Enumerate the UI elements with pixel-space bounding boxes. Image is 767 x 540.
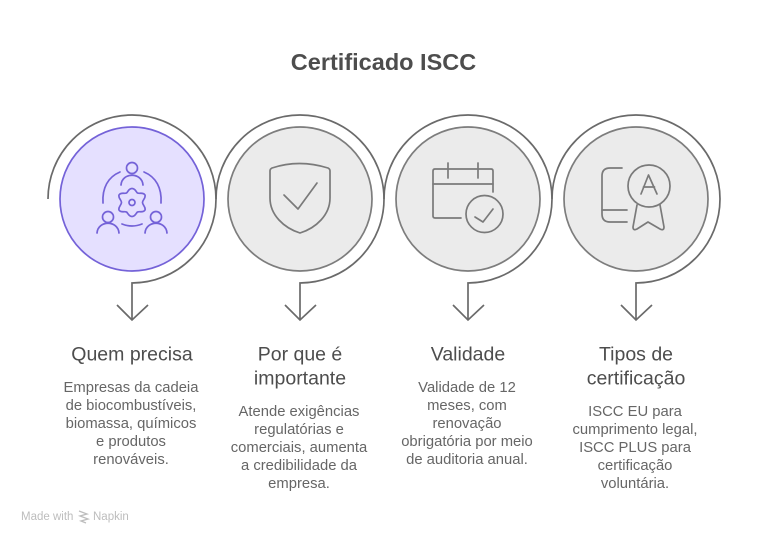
text: Validade description: renovação	[432, 416, 502, 432]
circle: step 1	[60, 127, 204, 271]
text: Tipos de certificação description: certificação	[598, 458, 672, 474]
heading: Por que é importante	[254, 344, 346, 390]
heading: Por que é importante: Por que é	[258, 344, 342, 366]
text: Tipos de certificação description: ISCC EU para	[588, 404, 683, 420]
text: Tipos de certificação description: cumprimento legal,	[572, 422, 698, 438]
text: Por que é importante description: regulatórias e	[254, 422, 344, 438]
watermark: Made with Napkin: Made with	[21, 511, 73, 523]
icon: Napkin logo	[79, 511, 88, 523]
heading: Tipos de certificação	[587, 344, 685, 390]
text: Validade description: obrigatória por meio	[401, 434, 533, 450]
heading: Validade: Validade	[431, 344, 505, 366]
text: Validade description: Validade de 12	[418, 380, 516, 396]
step 2: Por que é importante	[216, 115, 384, 492]
heading: Tipos de certificação: Tipos de	[599, 344, 673, 366]
arrow: step 4	[552, 115, 720, 320]
text: Por que é importante description: empresa.	[268, 476, 330, 492]
circle: step 3	[396, 127, 540, 271]
heading: Por que é importante: importante	[254, 368, 346, 390]
circle: step 2	[228, 127, 372, 271]
text: Quem precisa description: biomassa, químicos	[66, 416, 196, 432]
arrow: step 3	[384, 115, 552, 320]
watermark: Made with Napkin	[21, 511, 129, 523]
text: Validade description	[401, 380, 533, 468]
step 3: Validade	[384, 115, 552, 468]
text: Por que é importante description: Atende exigências	[239, 404, 359, 420]
icon: shield with check	[270, 164, 330, 233]
watermark: Made with Napkin: Napkin	[93, 511, 129, 523]
icon: book and award ribbon	[602, 165, 670, 230]
text: Quem precisa description: renováveis.	[93, 452, 169, 468]
arrow: step 1	[48, 115, 216, 320]
text: Tipos de certificação description: voluntária.	[601, 476, 669, 492]
heading: Tipos de certificação: certificação	[587, 368, 685, 390]
text: Tipos de certificação description	[572, 404, 698, 492]
text: Por que é importante description: a credibilidade da	[241, 458, 358, 474]
text: Tipos de certificação description: ISCC PLUS para	[579, 440, 692, 456]
text: Por que é importante description: comerciais, aumenta	[231, 440, 368, 456]
arrow: step 2	[216, 115, 384, 320]
icon: people around gear	[97, 162, 167, 233]
circle: step 4	[564, 127, 708, 271]
text: Quem precisa description: e produtos	[96, 434, 166, 450]
text: Validade description: meses, com	[427, 398, 507, 414]
text: Quem precisa description: de biocombustíveis,	[66, 398, 196, 414]
step 1: Quem precisa	[48, 115, 216, 468]
heading: Quem precisa: Quem precisa	[71, 344, 193, 366]
title: Certificado ISCC	[291, 49, 476, 75]
icon: calendar with check	[433, 163, 503, 232]
text: Quem precisa description: Empresas da cadeia	[64, 380, 199, 396]
text: Por que é importante description	[231, 404, 368, 492]
step 4: Tipos de certificação	[552, 115, 720, 492]
text: Validade description: de auditoria anual.	[406, 452, 528, 468]
text: Quem precisa description	[64, 380, 199, 468]
